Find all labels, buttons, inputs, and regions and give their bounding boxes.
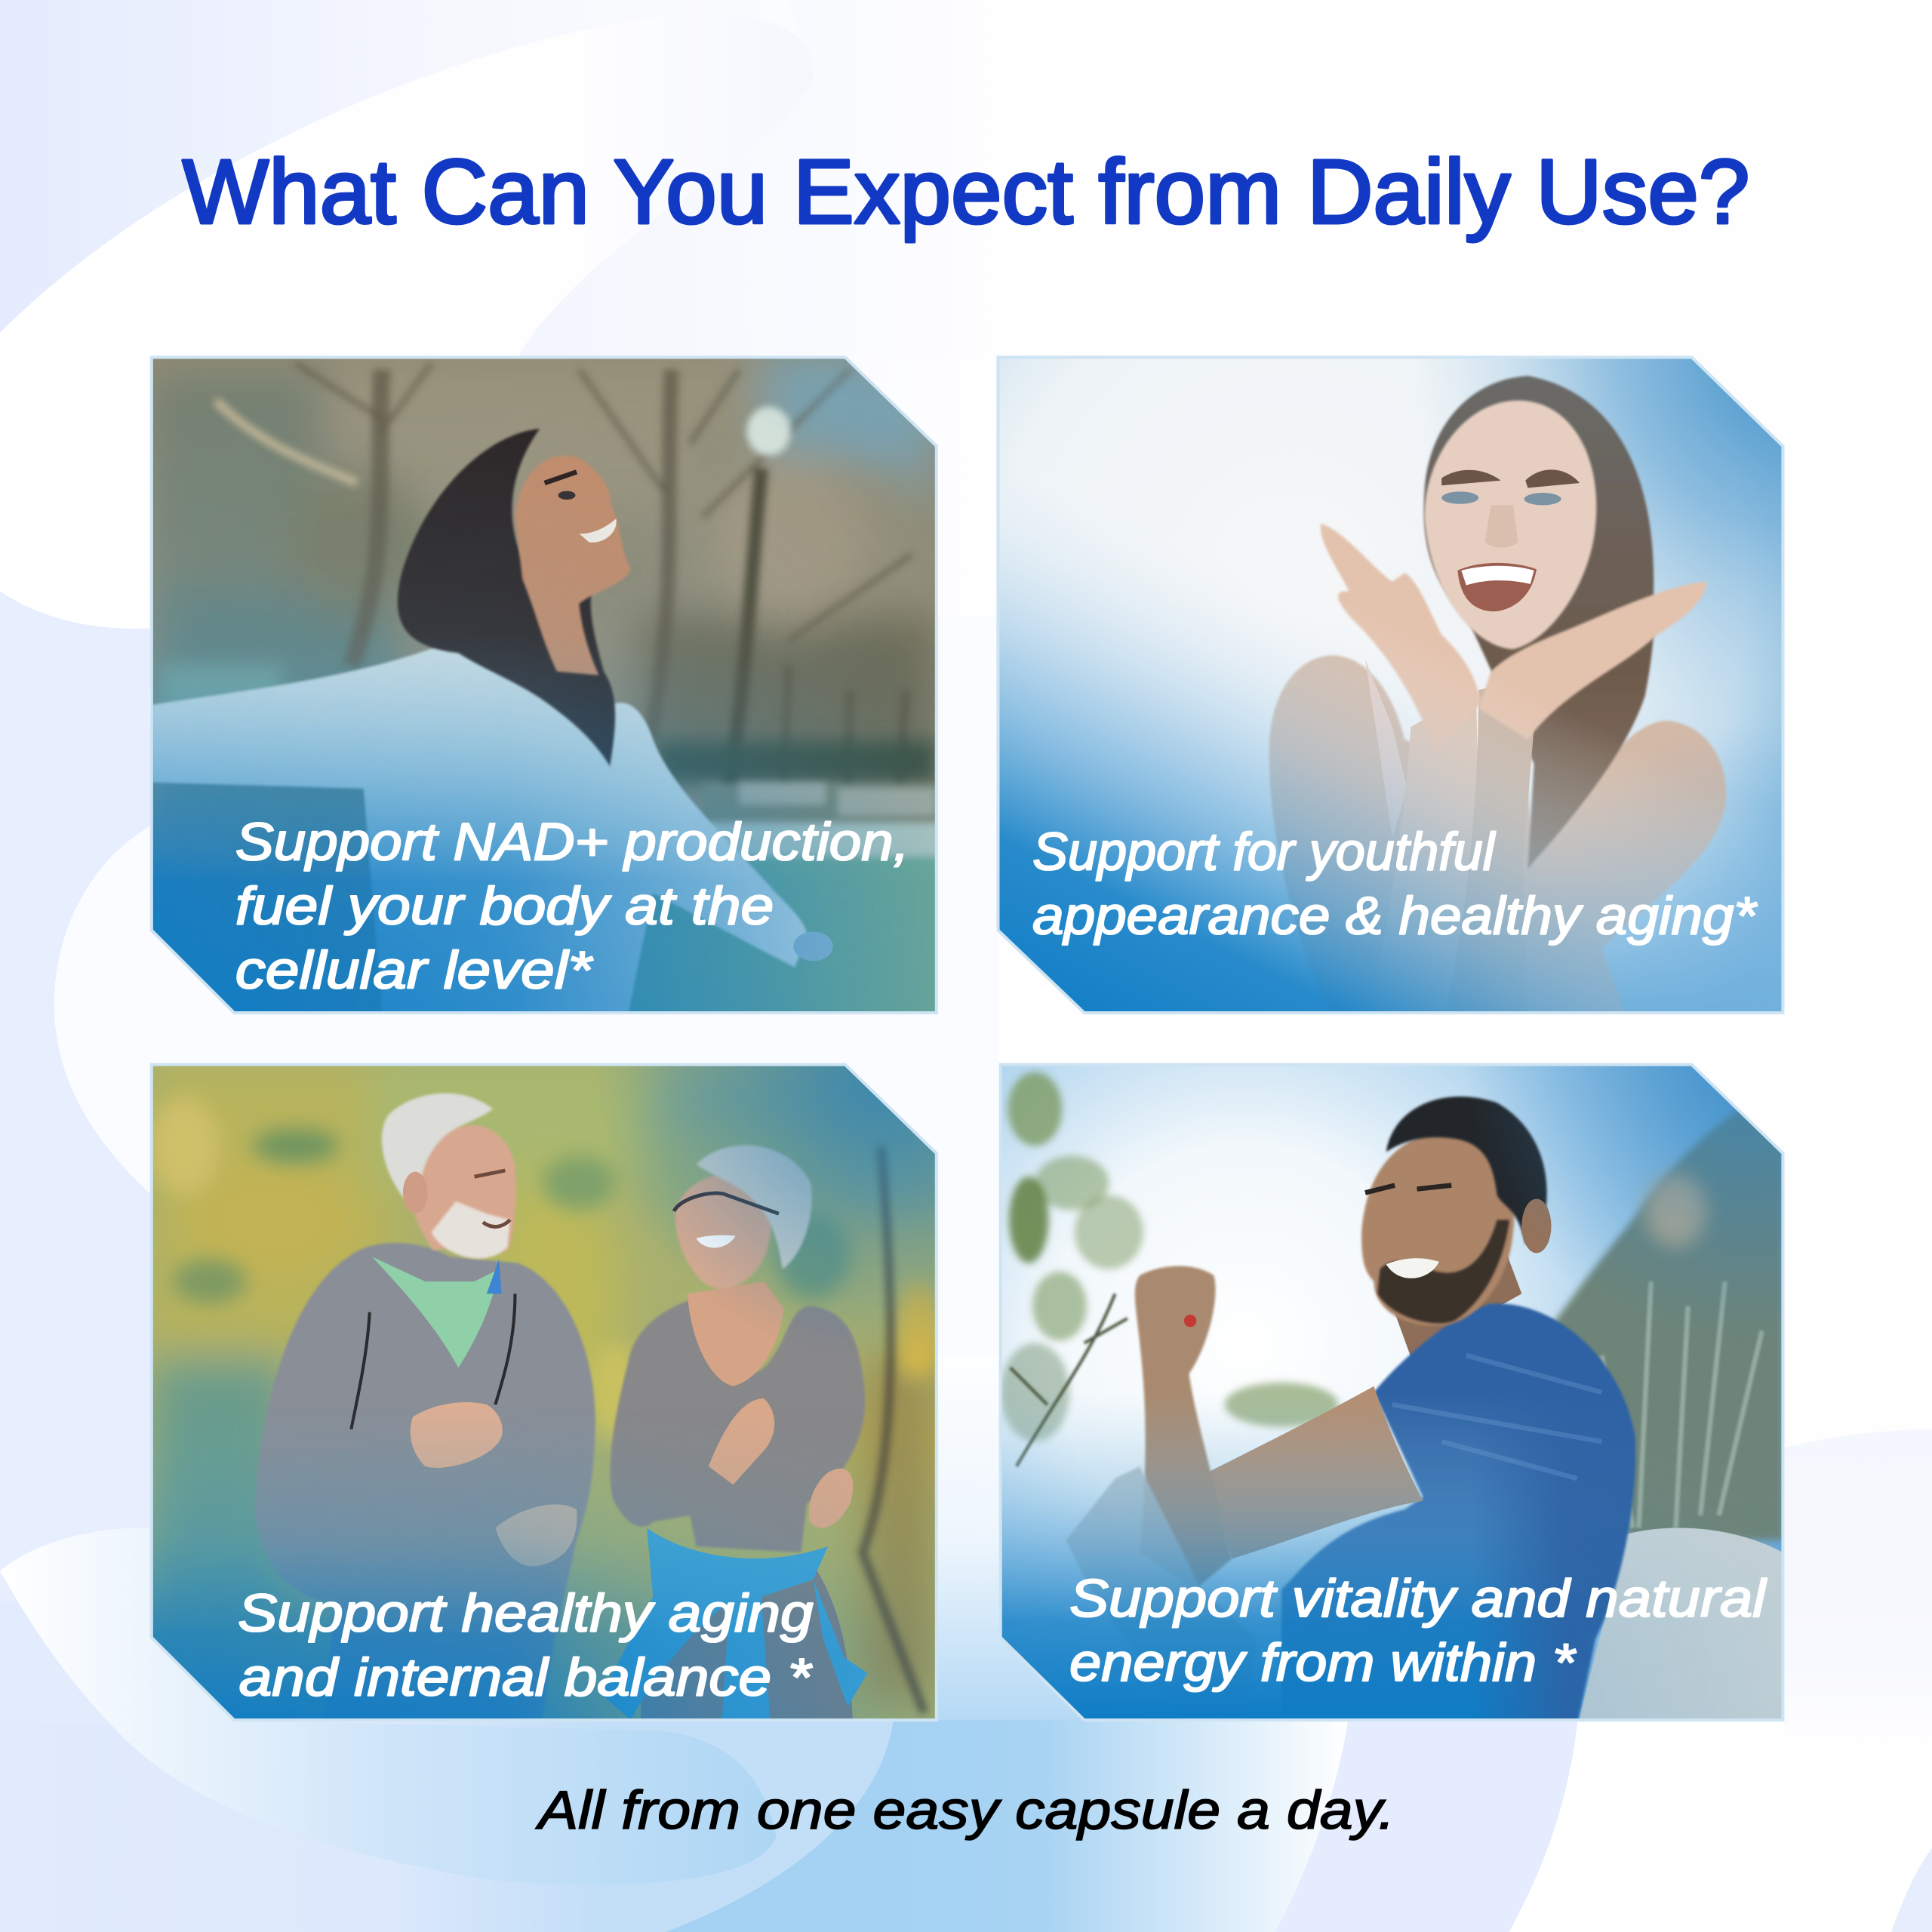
panel: youthful appearance (998, 357, 1786, 1017)
panel border (998, 357, 1783, 1013)
stretching arm (1208, 1386, 1423, 1558)
panel: healthy aging (150, 1065, 949, 1724)
caption: Support NAD+ production, (235, 812, 909, 872)
blue gradient overlay (1001, 1065, 1789, 1724)
photo: man stretching outdoors (1001, 1065, 1789, 1725)
woman chest and neck (688, 1281, 783, 1386)
caption: Support vitality and natural (1069, 1568, 1767, 1628)
lamp post (746, 407, 791, 456)
man shirt (372, 1257, 499, 1367)
caption: Support healthy aging (238, 1583, 814, 1643)
neck and face (515, 456, 631, 675)
hair (1424, 376, 1654, 869)
caption: appearance & healthy aging* (1032, 886, 1758, 946)
caption (235, 812, 909, 999)
photo: woman breathing in the park (152, 357, 943, 1017)
woman body (611, 1300, 866, 1552)
shirt (1281, 1303, 1635, 1725)
blue gradient overlay (152, 444, 935, 1011)
forearms (1367, 690, 1478, 1017)
title: What Can You Expect from Daily Use? (183, 141, 1749, 243)
man hands (411, 1402, 503, 1468)
tied blue sweater (601, 1527, 828, 1720)
hands (1321, 524, 1481, 752)
panel: vitality and energy (1001, 1065, 1789, 1725)
road (1577, 1527, 1783, 1725)
caption: Support for youthful (1032, 822, 1497, 881)
panel border (1001, 1065, 1783, 1720)
caption (1069, 1568, 1767, 1692)
hair and beard (1386, 1097, 1547, 1244)
caption: energy from within * (1069, 1632, 1577, 1692)
neck and ear (1392, 1244, 1521, 1374)
man hoodie (255, 1243, 595, 1720)
white long sleeve top (152, 643, 807, 1013)
mountain (1521, 1084, 1783, 1540)
woman head (675, 1173, 771, 1289)
face (1424, 401, 1596, 649)
photo: senior couple jogging (150, 1065, 949, 1724)
leggings (641, 1564, 853, 1720)
panel border (152, 1065, 937, 1720)
caption (238, 1583, 814, 1707)
panel: NAD+ production (152, 357, 943, 1017)
blue gradient overlay (998, 357, 1786, 1017)
caption: and internal balance * (239, 1647, 813, 1707)
man head (414, 1125, 516, 1252)
park ground and benches (616, 783, 943, 1017)
footer tagline: All from one easy capsule a day. (535, 1780, 1395, 1841)
sleeve cuff behind (1066, 1466, 1257, 1720)
head (1361, 1133, 1514, 1326)
caption: fuel your body at the (235, 875, 774, 935)
blue gradient overlay (152, 1065, 940, 1724)
shoulders and torso (1269, 655, 1726, 1017)
forearm and fist (1135, 1266, 1232, 1589)
photo: smiling woman with hands under chin (998, 357, 1786, 1017)
caption: cellular level* (235, 940, 594, 999)
panel border (152, 357, 937, 1013)
tree foliage (1001, 1072, 1338, 1441)
hair (398, 429, 615, 767)
caption (1032, 822, 1758, 946)
